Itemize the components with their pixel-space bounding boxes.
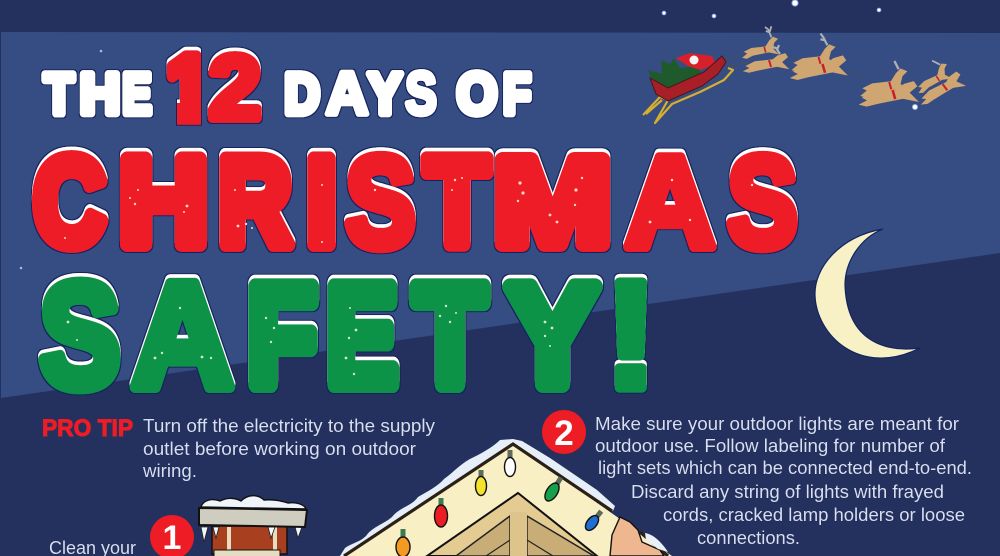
title word: CHRISTMAS: H xyxy=(119,133,208,272)
snow specks on green letters xyxy=(67,305,553,375)
title line: DAYS OF xyxy=(284,60,531,127)
title line: DAYS OF: S xyxy=(405,61,437,127)
bulb: yellow xyxy=(476,470,486,496)
pro tip text: wiring. xyxy=(142,461,197,481)
background: lighter sky panel xyxy=(1,32,1000,398)
title word: CHRISTMAS: C xyxy=(34,132,105,271)
title word: CHRISTMAS: M xyxy=(494,133,611,272)
step 2 text: outdoor use. Follow labeling for number of xyxy=(595,436,946,456)
santa xyxy=(676,53,716,70)
gable trim xyxy=(427,493,597,556)
pro tip label: PRO TIP xyxy=(42,415,133,442)
title numeral: 12: 2 xyxy=(209,38,261,138)
bulb: green xyxy=(542,475,566,503)
bulb: orange xyxy=(396,529,410,556)
step 2 text: Make sure your outdoor lights are meant for xyxy=(595,414,959,434)
step 2 xyxy=(542,410,972,548)
pro tip text xyxy=(142,416,435,481)
roof snow xyxy=(340,439,615,556)
title word: SAFETY!: E xyxy=(327,256,397,415)
title word: SAFETY!: T xyxy=(415,257,485,415)
gable wall xyxy=(343,443,672,556)
pro tip text: Turn off the electricity to the supply xyxy=(143,416,435,436)
title line: DAYS OF: F xyxy=(503,63,531,127)
title word: CHRISTMAS: T xyxy=(425,133,489,272)
step 1 xyxy=(49,515,194,556)
title numeral: 12: 1 xyxy=(167,38,211,139)
chimney bricks xyxy=(212,526,287,554)
chimney snow xyxy=(201,496,306,509)
gable inner panels xyxy=(456,516,510,556)
roof edge xyxy=(344,444,668,556)
stars xyxy=(20,0,917,269)
title word: CHRISTMAS xyxy=(34,130,797,275)
title word: CHRISTMAS: A xyxy=(625,131,715,275)
hand xyxy=(610,517,664,556)
pro tip text: outlet before working on outdoor xyxy=(143,439,416,459)
title word: SAFETY!: Y xyxy=(508,257,597,415)
title xyxy=(34,38,797,421)
title line: DAYS OF: D xyxy=(284,63,320,126)
step 2 text: cords, cracked lamp holders or loose xyxy=(663,505,965,525)
bulb: red xyxy=(434,498,448,527)
step 2 badge xyxy=(542,410,586,454)
step 2 text xyxy=(595,414,972,548)
title line: DAYS OF: Y xyxy=(368,61,402,126)
title line: THE: H xyxy=(80,63,120,126)
reindeer team xyxy=(743,26,965,106)
sleigh runners xyxy=(643,68,733,123)
title line: THE: E xyxy=(122,62,152,126)
illustration: roof with string lights xyxy=(340,439,672,556)
sleigh tree load xyxy=(648,58,702,88)
title word: SAFETY!: S xyxy=(40,252,120,418)
snow specks on red letters xyxy=(64,177,753,243)
title line: THE: T xyxy=(44,63,74,126)
step 2 text: light sets which can be connected end-to-end. xyxy=(598,458,972,478)
title word: CHRISTMAS: I xyxy=(306,132,337,271)
step 1 badge xyxy=(150,515,194,556)
step 1 badge: 1 xyxy=(163,519,181,556)
sleigh body xyxy=(650,56,726,101)
title word: SAFETY!: ! xyxy=(604,250,658,421)
reins xyxy=(726,51,922,90)
illustration: Santa's sleigh and reindeer xyxy=(643,26,965,123)
chimney cap xyxy=(199,508,307,527)
title word: SAFETY! xyxy=(40,250,658,421)
icicles xyxy=(201,527,302,542)
title word: SAFETY!: F xyxy=(247,257,317,415)
title word: CHRISTMAS: S xyxy=(346,130,415,274)
pro tip xyxy=(42,415,435,481)
title line: THE xyxy=(44,62,152,126)
step 2 text: Discard any string of lights with frayed xyxy=(631,482,944,502)
title word: SAFETY!: A xyxy=(132,251,233,419)
title line: DAYS OF: O xyxy=(457,61,497,126)
illustration: chimney xyxy=(199,496,307,556)
step 2 text: connections. xyxy=(697,528,800,548)
title numeral: 12 xyxy=(166,46,263,126)
title word: CHRISTMAS: S xyxy=(728,130,797,274)
title line: DAYS OF: A xyxy=(326,60,368,127)
illustration: crescent moon xyxy=(815,229,920,358)
bulb: blue xyxy=(583,508,605,533)
roof snow right xyxy=(645,533,668,552)
step 2 badge: 2 xyxy=(554,414,574,453)
title word: CHRISTMAS: R xyxy=(219,133,291,271)
bulb: white xyxy=(504,450,516,476)
